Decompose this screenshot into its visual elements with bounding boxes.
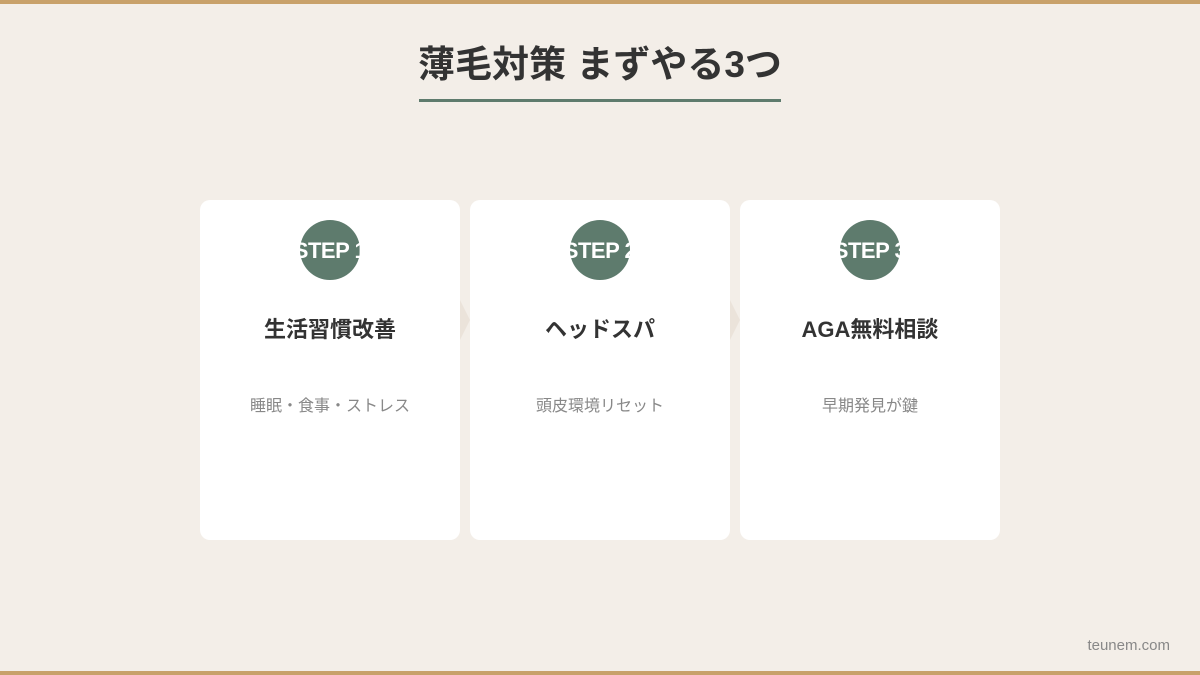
heading 1: 生活習慣改善 xyxy=(264,317,396,342)
arrow 1 xyxy=(460,300,470,340)
step 3 badge xyxy=(840,220,900,280)
arrow 2 xyxy=(730,300,740,340)
step 1 badge xyxy=(300,220,360,280)
card: step 2 xyxy=(470,200,730,540)
footer: teunem.com xyxy=(1087,637,1170,654)
sub 3: 早期発見が鍵 xyxy=(822,398,918,415)
card: step 3 xyxy=(740,200,1000,540)
heading 3: AGA無料相談 xyxy=(802,317,938,342)
card: step 3: STEP 3 xyxy=(834,238,906,263)
heading 2: ヘッドスパ xyxy=(545,317,655,342)
title: 薄毛対策 まずやる3つ xyxy=(418,44,782,85)
sub 2: 頭皮環境リセット xyxy=(536,398,664,415)
card: step 2: STEP 2 xyxy=(564,238,636,263)
step 2 badge xyxy=(570,220,630,280)
sub 1: 睡眠・食事・ストレス xyxy=(250,398,410,415)
card: step 1: STEP 1 xyxy=(294,238,366,263)
card: step 1 xyxy=(200,200,460,540)
